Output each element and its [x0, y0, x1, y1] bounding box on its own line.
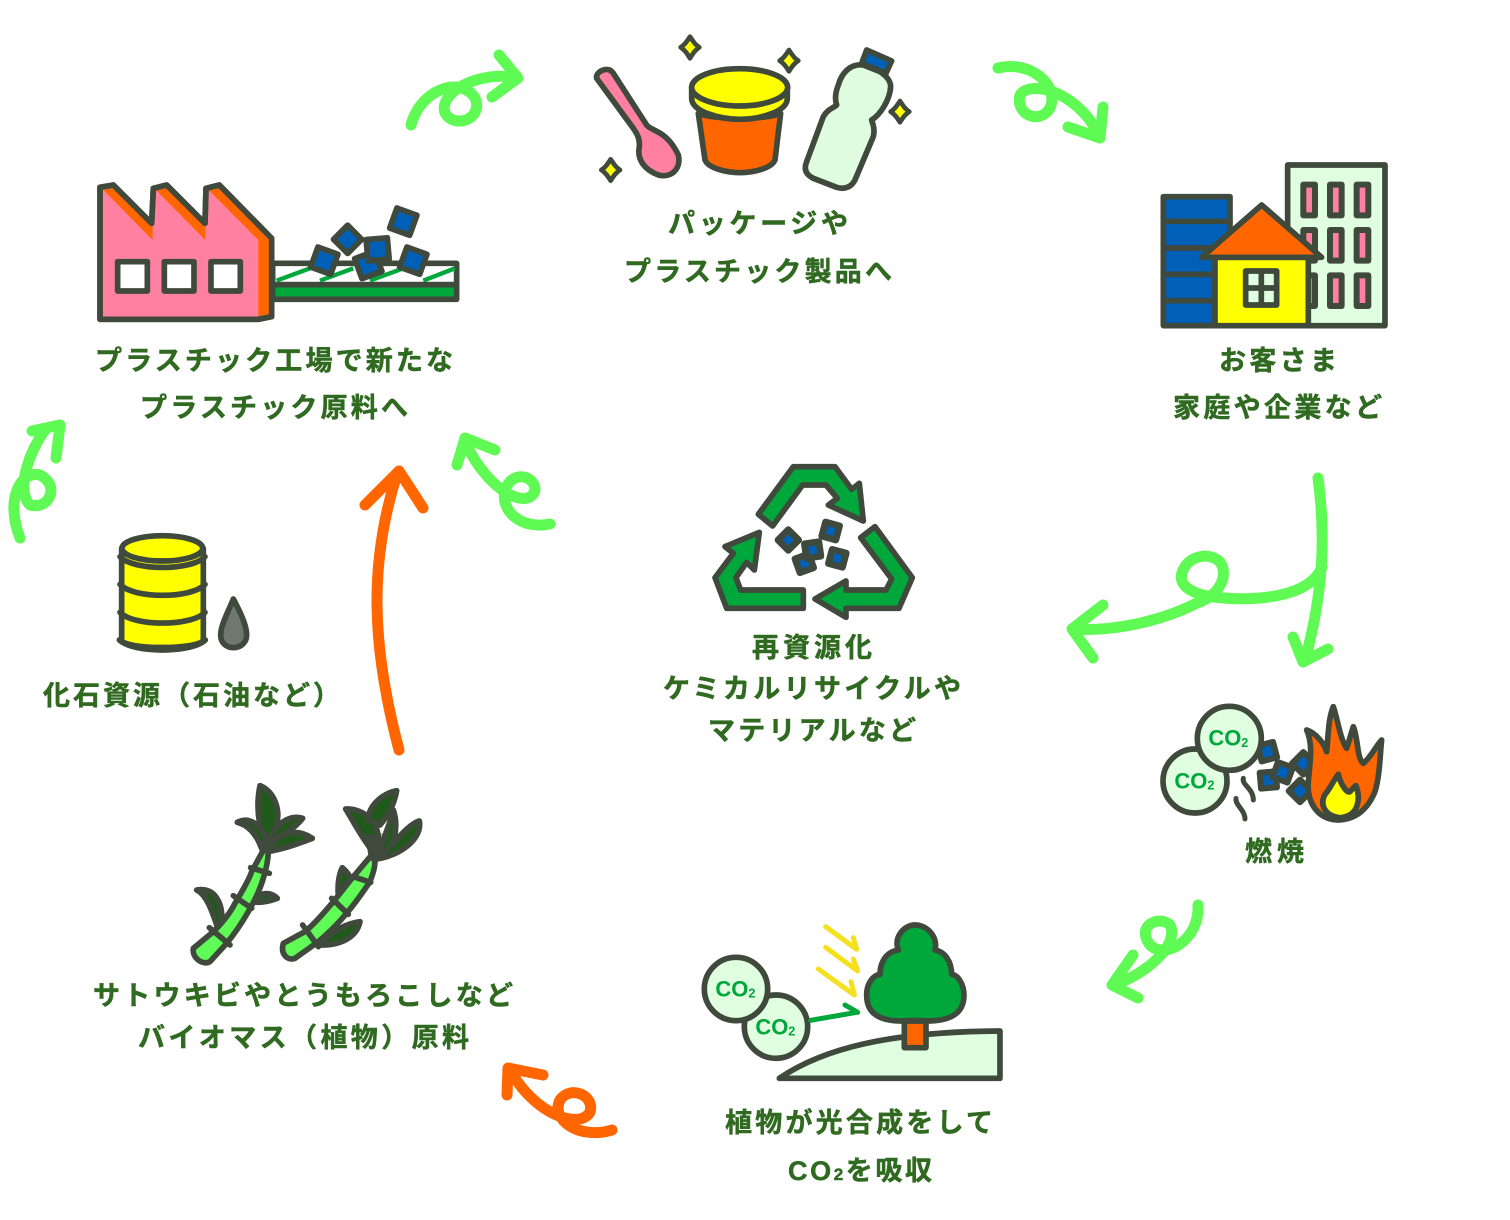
label: biomass	[93, 981, 513, 1053]
label: burning: 燃焼	[1245, 837, 1304, 867]
label: recycling: ケミカルリサイクルや	[663, 674, 961, 704]
label: biomass: サトウキビやとうもろこしなど	[93, 981, 513, 1011]
label: photosynthesis	[725, 1107, 993, 1186]
label: biomass: バイオマス（植物）原料	[138, 1023, 469, 1053]
icon: tree absorbing CO2: CO	[715, 976, 748, 1001]
icon: burning with CO2	[1163, 706, 1382, 820]
icon: burning with CO2: CO	[1174, 768, 1207, 793]
label: plastic factory	[95, 346, 453, 423]
label: recycling	[663, 633, 961, 746]
arrow: factory to products	[411, 55, 518, 125]
arrow: photosynthesis to biomass	[507, 1068, 612, 1133]
icon: oil drum and drop	[119, 536, 247, 650]
icon: tree absorbing CO2: CO	[755, 1014, 788, 1039]
label: packages and plastic products: プラスチック製品へ	[624, 257, 892, 287]
label: packages and plastic products	[624, 209, 892, 287]
icon: factory with conveyor	[100, 185, 457, 319]
icon: customer buildings and house	[1163, 165, 1385, 326]
icon: sugar cane	[193, 786, 420, 963]
label: customers	[1173, 346, 1382, 423]
icon: recycling symbol	[715, 467, 912, 617]
arrow: products to customers	[998, 66, 1103, 138]
label: photosynthesis: 植物が光合成をして	[725, 1107, 993, 1138]
icon: burning with CO2: CO	[1208, 726, 1241, 751]
label: recycling: 再資源化	[752, 633, 872, 663]
label: fossil resources: 化石資源（石油など）	[43, 681, 340, 711]
arrow: customers to recycling and burning	[1072, 478, 1328, 662]
arrow: burning to photosynthesis	[1112, 905, 1198, 998]
label: customers: お客さま	[1219, 346, 1337, 376]
icon: tree absorbing CO2: 2	[788, 1025, 795, 1039]
label: recycling: マテリアルなど	[708, 716, 916, 746]
label: packages and plastic products: パッケージや	[668, 209, 848, 239]
icon: tree absorbing CO2: 2	[748, 987, 755, 1001]
arrow: biomass to plastic factory	[365, 471, 423, 750]
icon: burning with CO2: 2	[1207, 779, 1214, 793]
label: plastic factory: プラスチック原料へ	[140, 393, 408, 423]
icon: tree absorbing CO2	[704, 925, 1000, 1078]
icon: burning with CO2: 2	[1241, 736, 1248, 750]
label: photosynthesis: CO2を吸収	[788, 1156, 932, 1186]
label: plastic factory: プラスチック工場で新たな	[95, 346, 453, 376]
label: customers: 家庭や企業など	[1173, 393, 1382, 423]
icon: plastic products (spoon, cup, bottle)	[597, 37, 909, 188]
arrow: recycling to plastic factory	[457, 438, 550, 525]
arrow: fossil resources to plastic factory	[14, 425, 60, 538]
